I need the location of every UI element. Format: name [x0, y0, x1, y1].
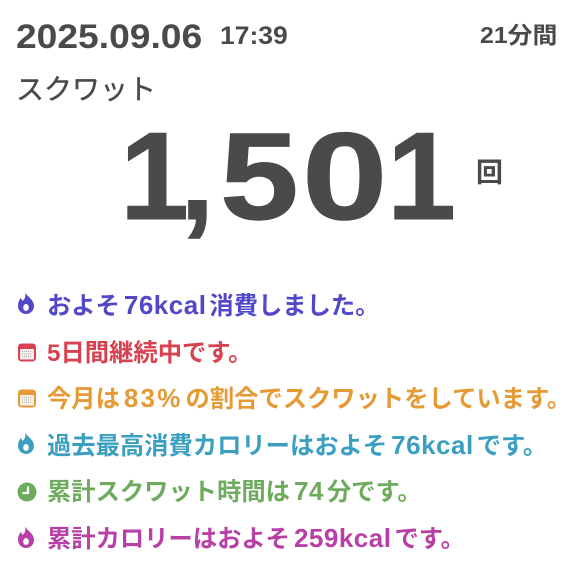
icon: calendar	[18, 344, 36, 362]
squat count: 0	[302, 108, 388, 246]
icon: flame	[18, 292, 34, 314]
stat: total time: 累計スクワット時間は74分です。	[47, 476, 422, 506]
squat count: 5	[220, 108, 299, 246]
time: 17:39	[220, 22, 288, 50]
icon: flame	[18, 526, 34, 548]
icon: calendar	[18, 390, 36, 408]
date: 2025.09.06	[16, 18, 202, 56]
stat: total calories: 累計カロリーはおよそ259kcalです。	[47, 523, 465, 553]
exercise name: スクワット	[16, 74, 156, 105]
squat count	[120, 108, 456, 246]
stat: monthly rate: 今月は83%の割合でスクワットをしています。	[47, 383, 571, 413]
squat count: 1	[120, 108, 189, 246]
icon: flame	[18, 432, 34, 454]
stat: calories burned: およそ76kcal消費しました。	[47, 290, 380, 320]
stat: best calories: 過去最高消費カロリーはおよそ76kcalです。	[47, 430, 547, 460]
icon: clock	[18, 482, 36, 502]
squat count: ,	[180, 108, 214, 246]
stat: streak: 5日間継続中です。	[47, 340, 252, 367]
squat count: 1	[387, 108, 456, 246]
duration: 21分間	[480, 22, 557, 48]
count unit: 回	[476, 158, 503, 188]
